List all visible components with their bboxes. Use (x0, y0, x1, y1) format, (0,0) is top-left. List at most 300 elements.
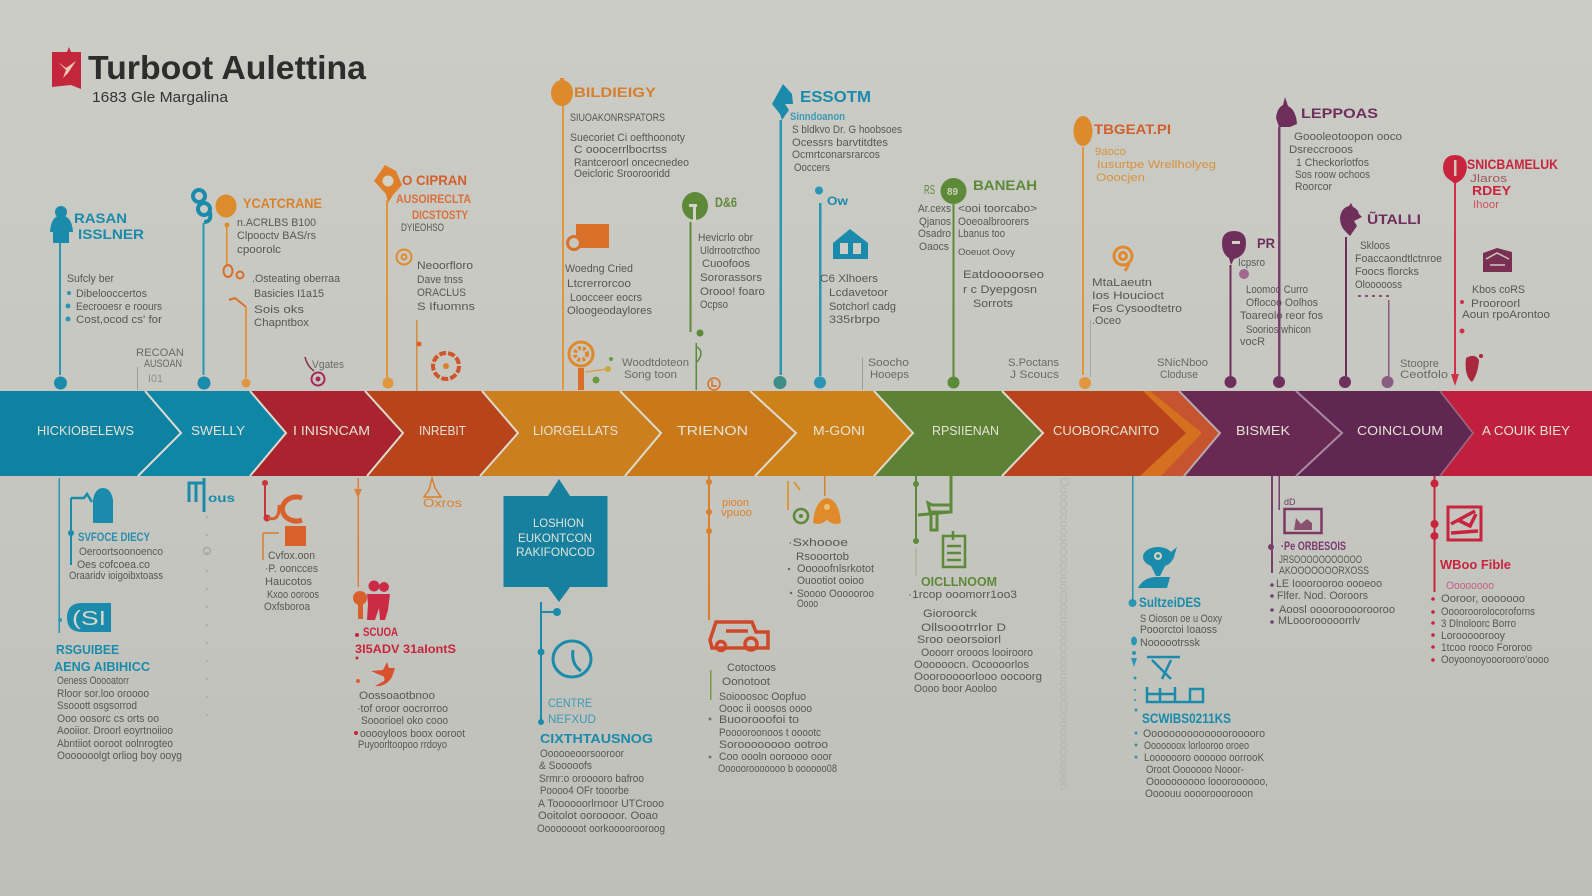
heading: D&6 (715, 194, 737, 210)
heading: Ihoor (1473, 199, 1499, 211)
icon: house (833, 229, 868, 259)
text block (820, 273, 896, 326)
stem (198, 223, 210, 390)
text block: Oonotoot (722, 676, 770, 688)
text block: Ooooooolgt orliog boy ooyg (57, 750, 182, 762)
text block: Flfer. Nod. Ooroors (1277, 590, 1368, 602)
icon: orange tent (424, 478, 441, 497)
text block: Oes cofcoea.co (77, 559, 150, 571)
text block (67, 273, 162, 326)
panel: lower column 7 orange green (788, 476, 874, 610)
small note: Hooeps (870, 369, 910, 381)
timeline bar: TRIENON (677, 423, 748, 438)
stem (1451, 183, 1464, 386)
icon: orange badge (374, 165, 402, 203)
text block: Lbanus too (958, 228, 1005, 240)
text block: Ooooroorolocoroforns (1441, 606, 1535, 618)
text block: Dave tnss (417, 274, 463, 286)
text block (908, 589, 1042, 695)
text block: Sotchorl cadg (829, 301, 896, 313)
text block: Eatdoooorseo (963, 269, 1044, 281)
text block: Aoun rpoArontoo (1462, 309, 1550, 321)
text block: Ooo oosorc cs orts oo (57, 713, 159, 725)
panel: lower column 3 red orange (262, 480, 319, 613)
text block: Ooccers (794, 162, 830, 174)
panel: upper column 11 purple (1273, 97, 1402, 388)
small note (622, 357, 689, 381)
text block: Soooo Oooooroo (797, 588, 874, 600)
timeline bar: I INISNCAM (293, 423, 370, 438)
stem (774, 120, 786, 389)
text block: Foaccaondtlctnroe (1355, 253, 1442, 265)
text block (264, 550, 319, 613)
title block (52, 47, 367, 106)
text block: r c Dyepgosn (963, 284, 1037, 296)
text block: Oeroortsoonoenco (79, 546, 163, 558)
text block: <ooi toorcabo> (958, 203, 1037, 215)
text block: Suecoriet Ci oefthoonoty (570, 132, 685, 144)
panel: upper column 8 green (918, 177, 1060, 388)
text block: Sroo oeorsoiorl (917, 634, 1001, 646)
text block: Ooocjen (1096, 172, 1145, 184)
text block: A Toooooorlrnoor UTCrooo (538, 798, 664, 810)
text block: Ooooofnlsrkotot (797, 563, 874, 575)
text block: Poooo4 OFr tooorbe (540, 785, 629, 797)
panel: upper column 3 orange (374, 165, 476, 391)
stem (1224, 265, 1249, 388)
icon: orange C (262, 480, 302, 522)
heading: ·Pe ORBESOIS (1281, 539, 1346, 553)
dashes (1358, 295, 1391, 297)
panel: upper column 10 purple (1222, 231, 1323, 388)
panel: upper column 6 teal (772, 84, 902, 389)
timeline bar: LIORGELLATS (533, 423, 618, 438)
timeline bar: HICKIOBELEWS (37, 423, 134, 438)
text block (1441, 593, 1549, 666)
small note: J Scoucs (1010, 369, 1060, 381)
text block: AKOOOOOOORXOSS (1279, 565, 1369, 577)
text block: MLooorooooorrlv (1278, 615, 1360, 627)
text block: Oeness Ooooatorr (57, 675, 129, 687)
small note: Song toon (624, 369, 677, 381)
text block: Orooo! foaro (700, 286, 765, 298)
text block: Ltcrerrorcoo (567, 278, 631, 290)
icon: balloon (1074, 116, 1092, 146)
text block: Puyoorltoopoo rrdoyo (358, 739, 447, 751)
icon: green circle (940, 178, 966, 204)
panel: teal callout box (504, 479, 608, 602)
text block: Abntiiot ooroot oolnrogteo (57, 738, 173, 750)
icon: purple pin (1340, 203, 1362, 236)
timeline bar: CUOBORCANITO (1053, 423, 1159, 438)
text block: Woedng Cried (565, 263, 633, 275)
faint dots (204, 516, 210, 727)
text block: Oeicloric Sroorooridd (574, 168, 670, 180)
subheading: Oooooooo (1446, 580, 1494, 592)
label: ous (208, 491, 235, 505)
text block: Ooeuot Oovy (958, 247, 1016, 257)
icon: teal pin (772, 84, 793, 120)
subheading: NEFXUD (548, 712, 596, 726)
icon: framed picture (1284, 497, 1322, 533)
icon: crane figure (68, 488, 113, 565)
text block (1462, 284, 1550, 321)
heading: WBoo Fible (1440, 557, 1511, 572)
icon: people (353, 580, 390, 620)
text block: Ssooott osgsorrod (57, 700, 137, 712)
text block: Prooroorl (1471, 298, 1520, 310)
text block: ·tof oroor oocrorroo (357, 703, 448, 715)
text block: Oaocs (919, 241, 949, 253)
text block (698, 232, 765, 311)
subheading: SVFOCE DIECY (78, 530, 150, 544)
text block: ·Sxhoooe (788, 537, 848, 549)
text block: Ocpso (700, 299, 728, 311)
icon: red flag logo (52, 47, 81, 89)
small note: SNicNboo (1157, 357, 1208, 369)
heading: Jlaros (1470, 173, 1508, 185)
stem (54, 243, 67, 390)
panel: lower column 1 teal (54, 478, 182, 762)
icon: orange bulb (216, 194, 236, 267)
text block: 335rbrpo (829, 314, 880, 326)
text block: Neoorfloro (417, 260, 473, 272)
text block: ORACLUS (417, 287, 466, 299)
text block: Ooeoalbroorers (958, 216, 1029, 228)
text block: Sois oks (254, 304, 305, 316)
text block: Basicies I1a15 (254, 288, 324, 300)
text block: Oooooocn. Ocoooorlos (914, 659, 1029, 671)
stem (242, 307, 250, 388)
text block: Uldrrootrcthoo (700, 245, 760, 257)
text block: S bldkvo Dr. G hoobsoes (792, 124, 902, 136)
small note: Ceotfolo (1400, 369, 1448, 381)
text block: Ocmrtconarsrarcos (792, 149, 880, 161)
text block: Ouootiot ooioo (797, 575, 864, 587)
heading (396, 172, 471, 234)
stem (538, 602, 561, 725)
text block: Soiooosoc Oopfuo (719, 691, 806, 703)
text block: Ios Houcioct (1092, 290, 1164, 302)
stem (1079, 147, 1091, 389)
heading: SCUOA (363, 625, 398, 639)
text block: cpoorolc (237, 244, 282, 256)
text block: Cvfox.oon (268, 550, 315, 562)
timeline bar: M-GONI (813, 423, 865, 438)
text block: Sos roow ochoos (1295, 169, 1370, 181)
panel: lower small orange note (423, 478, 462, 510)
heading: ŨTALLI (1367, 210, 1421, 227)
text block: Oooo boor Aooloo (914, 683, 997, 695)
icon: green pin (682, 192, 708, 222)
text block: Aooiior. Droorl eoyrtnoiioo (57, 725, 173, 737)
text block: 1tcoo rooco Fororoo (1441, 642, 1532, 654)
stem (1128, 476, 1138, 712)
heading: SCWIBS0211KS (1142, 710, 1231, 726)
text block: Sorrots (973, 298, 1014, 310)
text block: Oxfsboroa (264, 601, 311, 613)
text block: Lcdavetoor (829, 287, 888, 299)
text block (1143, 728, 1268, 800)
text block (918, 203, 1044, 310)
panel: upper column 12 purple (1339, 203, 1448, 388)
text block (537, 748, 665, 835)
small note: Woodtdoteon (622, 357, 689, 369)
text block (565, 263, 653, 317)
text block: Oossoaotbnoo (359, 690, 435, 702)
icon: person (50, 206, 73, 243)
text block: Iusurtpe Wrellholyeg (1097, 159, 1216, 171)
text block: Oloooooss (1355, 279, 1402, 291)
text block: Pooorctoi Ioaoss (1140, 624, 1217, 636)
text block: Coo oooln ooroooo ooor (719, 751, 832, 763)
icon: teal badge: (SI (72, 608, 106, 630)
subtitle: 1683 Gle Margalina (92, 89, 229, 106)
small note (1400, 358, 1448, 381)
text block: Oflocoo Oolhos (1246, 297, 1318, 309)
text block: C ooocerrlbocrtss (574, 144, 668, 156)
small note (136, 347, 184, 390)
icon: teal gate (189, 478, 205, 512)
text block: Srmr:o orooooro bafroo (539, 773, 644, 785)
text block (718, 662, 837, 775)
icon: document (943, 531, 965, 567)
heading: SultzeiDES (1139, 594, 1201, 610)
text block: Toareolo reor fos (1240, 310, 1323, 322)
text block: Dibelooccertos (76, 288, 147, 300)
heading: YCATCRANE (243, 195, 322, 211)
text block (357, 690, 465, 751)
text block (570, 112, 689, 180)
panel: lower column 10 purple (1268, 476, 1395, 627)
text block: Ooooorooooooo b oooooo08 (718, 763, 837, 775)
text block: Oooooooot oorkoooorooroog (537, 823, 665, 835)
text block: Ooyoonoyooorooro'oooo (1441, 654, 1549, 666)
text block: Chapntbox (254, 317, 310, 329)
timeline bar: COINCLOUM (1357, 423, 1443, 438)
text block: Hevicrlo obr (698, 232, 753, 244)
small note: Soocho (868, 357, 909, 369)
icon: green seat (918, 476, 951, 530)
text block: Oooo (797, 598, 818, 610)
text block: Soorios whicon (1246, 324, 1311, 336)
heading: OICLLNOOM (921, 574, 997, 589)
small note (1008, 357, 1060, 381)
stem (1430, 476, 1438, 592)
text block (1095, 146, 1216, 184)
text block: 9aoco (1095, 146, 1126, 158)
icon: purple house (1483, 248, 1512, 272)
text block (790, 111, 902, 174)
stem (913, 476, 919, 576)
small note: I01 (148, 373, 163, 385)
label: pioon (722, 497, 749, 509)
icon: swirl (1114, 247, 1132, 271)
icon: gear (433, 353, 459, 379)
icon: circle (553, 641, 591, 677)
text block: Noooootrssk (1140, 637, 1200, 649)
text block: Rantceroorl oncecnedeo (574, 157, 689, 169)
text block: Sufcly ber (67, 273, 114, 285)
icon: purple target (305, 357, 324, 386)
text block: Icpsro (1238, 257, 1265, 269)
subheading (548, 696, 596, 726)
heading: RSGUIBEE (56, 642, 119, 657)
stem (382, 200, 394, 388)
timeline bar: INREBIT (419, 423, 466, 438)
text block: Gioroorck (923, 608, 978, 620)
text block: Lorooooorooy (1441, 630, 1505, 642)
icon: truck (710, 622, 768, 650)
text block: Cotoctoos (727, 662, 776, 674)
heading (1467, 156, 1558, 211)
text block: JRSOOOOOOOOOOO (1279, 554, 1362, 566)
text block: Kxoo ooroos (267, 589, 319, 601)
heading: SNICBAMELUK (1467, 156, 1558, 172)
text block: Oloogeodaylores (567, 305, 653, 317)
small note: Cloduse (1160, 369, 1198, 381)
text block (237, 217, 341, 329)
heading: RDEY (1472, 183, 1511, 198)
heading (355, 625, 456, 683)
text block: Ocessrs barvtitdtes (792, 137, 889, 149)
text block (57, 675, 182, 762)
text block (788, 537, 874, 610)
label: Oxros (423, 496, 462, 510)
text block: Foocs florcks (1355, 266, 1419, 278)
text block: Oooooeoorsooroor (540, 748, 624, 760)
stem (1339, 237, 1394, 388)
text block: ·1rcop ooomorr1oo3 (908, 589, 1017, 601)
small note: Vgates (312, 359, 344, 371)
text block: Cuoofoos (702, 258, 751, 270)
text block: S Oioson oe u Ooxy (1140, 613, 1222, 625)
icon: swoosh (371, 662, 395, 686)
label (721, 497, 752, 519)
panel: lower column 2 teal (189, 478, 235, 727)
timeline bar: RPSIIENAN (932, 423, 999, 438)
heading: BILDIEIGY (574, 84, 657, 100)
icon: balloon (551, 78, 573, 106)
text block (1140, 613, 1222, 649)
icon: pepper (1466, 354, 1483, 382)
panel: lower column 9 teal (1128, 476, 1268, 800)
stem (948, 204, 960, 388)
text block: C6 Xlhoers (820, 273, 879, 285)
stem (416, 320, 422, 391)
text block: Aoosl ooooroooorooroo (1279, 604, 1395, 616)
icon: teal X figure (1147, 657, 1180, 679)
icon: teal blocks (1147, 687, 1203, 702)
heading: CIXTHTAUSNOG (540, 731, 653, 746)
icon: orange square (263, 526, 306, 560)
text block: Rloor sor.loo oroooo (57, 688, 149, 700)
text block: Loomoo Curro (1246, 284, 1308, 296)
icon: framed picture: dD (1284, 497, 1296, 507)
text block: Dsreccrooos (1289, 144, 1354, 156)
heading: 3I5ADV 31aIontS (355, 642, 456, 656)
panel: upper column 2 teal and orange (193, 190, 344, 390)
text block: Clpooctv BAS/rs (237, 230, 316, 242)
small note (862, 357, 910, 390)
panel: upper column 9 orange (1074, 116, 1216, 389)
panel: upper column 4 orange (551, 78, 689, 390)
text block: S Ifuomns (417, 301, 476, 313)
text block: LE Iooorooroo oooeoo (1276, 578, 1382, 590)
text block: Osadro (918, 228, 951, 240)
icon: orange card (568, 224, 609, 250)
timeline bar (0, 391, 1592, 476)
text block: Pooooroonoos t ooootc (719, 727, 821, 739)
icon: red frame (1448, 507, 1481, 540)
text block: Kbos coRS (1472, 284, 1525, 296)
timeline bar: BISMEK (1236, 423, 1290, 438)
icon: teal badge (67, 603, 111, 632)
text block: vocR (1240, 336, 1265, 348)
heading: RASAN (74, 210, 127, 226)
stem (1273, 127, 1285, 388)
heading: RS (924, 182, 935, 197)
small note: AUSOAN (144, 358, 182, 370)
text block: Haucotos (265, 576, 312, 588)
text block: Ooroor, ooooooo (1441, 593, 1525, 605)
stem (58, 478, 62, 633)
heading: AUSOIRECLTA (396, 192, 471, 206)
heading: BANEAH (973, 177, 1037, 193)
text block (1238, 257, 1323, 348)
text block: Sooorioel oko cooo (361, 715, 448, 727)
text block: Ooitolot ooroooor. Ooao (538, 810, 658, 822)
text block: Oraaridv ioigoibxtoass (69, 570, 163, 582)
small note: Stoopre (1400, 358, 1439, 370)
text block: .Oceo (1092, 315, 1121, 327)
icon: teal mascot (1138, 547, 1177, 588)
faint vertical text: Ooooocoooooooooocoocoooooooooooocoooooooooooo (1057, 477, 1072, 790)
small note: S.Poctans (1008, 357, 1060, 369)
text block (1092, 277, 1182, 327)
text block: Oooooooooo loooroooooo, (1146, 776, 1268, 788)
text block: Ollsoootrrlor D (921, 622, 1006, 634)
text block: MtaLaeutn (1092, 277, 1152, 289)
icon: purple head (1222, 231, 1246, 265)
text block: Qjanos (919, 216, 951, 228)
stem (562, 106, 564, 390)
icon: orange blob and green ring (788, 476, 841, 524)
stem (354, 478, 362, 587)
text block: Oooc ii ooosos oooo (719, 703, 812, 715)
text block: Rsooortob (796, 551, 849, 563)
text block (1289, 131, 1402, 193)
text block: Oooorr orooos looirooro (921, 647, 1033, 659)
icon: wheel (569, 342, 613, 390)
text block: Oooooooooooooorooooro (1143, 728, 1265, 740)
icon: orange rings (224, 265, 246, 307)
text block: Sinndoanon (790, 111, 845, 123)
icon: green circle: 89 (947, 187, 959, 198)
heading: TBGEAT.PI (1094, 121, 1171, 137)
panel: teal callout box: RAKIFONCOD (516, 545, 595, 559)
timeline bar: A COUIK BIEY (1482, 423, 1570, 438)
title: Turboot Aulettina (88, 49, 367, 86)
text block (417, 260, 476, 313)
panel: upper column 5 green (682, 192, 765, 390)
icon label: Ow (827, 194, 849, 208)
text block: Eecrooesr e roours (76, 301, 162, 313)
label: vpuoo (721, 507, 752, 519)
panel: lower column 5 teal (537, 602, 665, 835)
heading: DICSTOSTY (412, 208, 468, 222)
stem (814, 186, 826, 388)
